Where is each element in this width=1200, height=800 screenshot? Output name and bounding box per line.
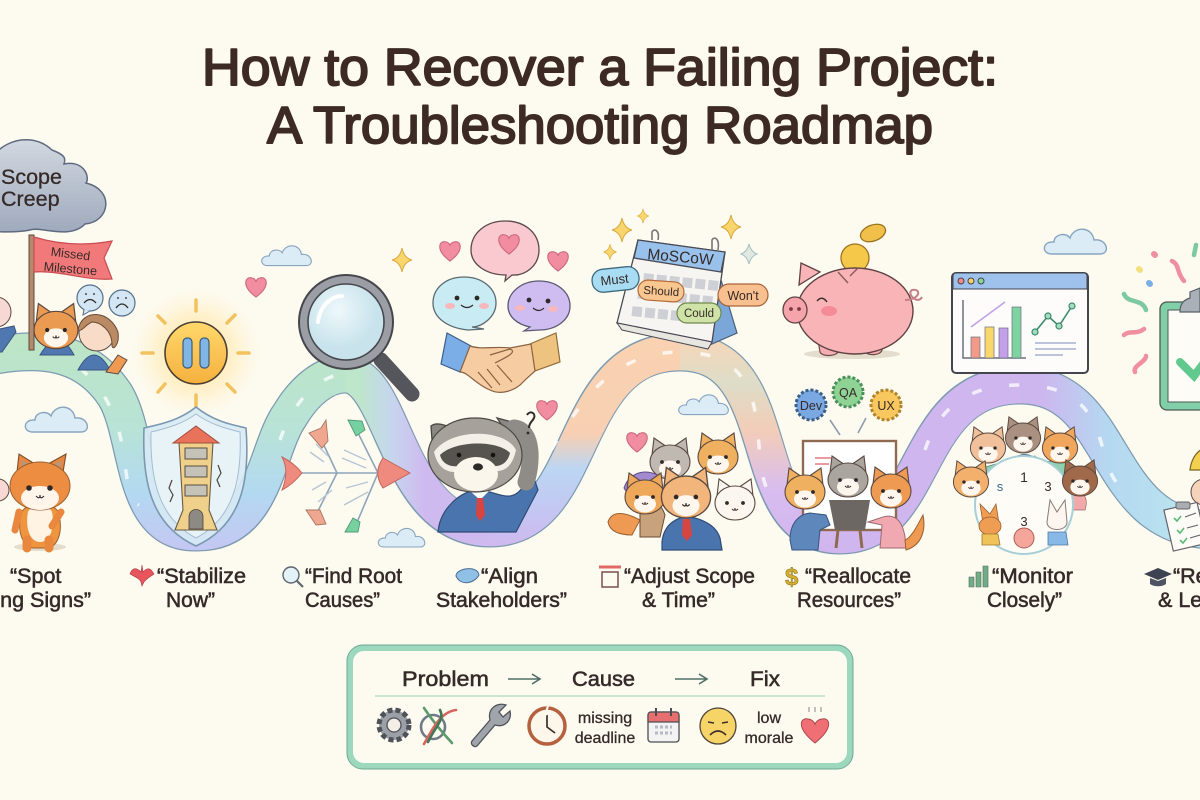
text: low morale: morale	[745, 730, 794, 747]
icon: heart	[801, 707, 829, 743]
label: reallocate resources: $	[785, 564, 799, 591]
label: align stakeholders	[436, 564, 567, 612]
sparkles	[604, 209, 757, 264]
small cloud	[262, 246, 311, 266]
arrow	[508, 674, 540, 684]
storm cloud: scope creep: Scope	[1, 165, 62, 189]
step 1: warning signs scene	[0, 140, 135, 551]
role gears: UX	[877, 399, 895, 413]
fox and colleague on hill	[0, 297, 127, 374]
clock table with team: 3	[1020, 514, 1028, 529]
label: adjust scope and time	[599, 564, 755, 612]
step 5: adjust scope and time scene	[591, 209, 768, 550]
label: find root causes: Causes”	[305, 588, 380, 612]
label: spot warning signs	[0, 564, 91, 612]
step 8: review and learn scene	[1124, 245, 1200, 551]
label: find root causes: “Find Root	[305, 564, 402, 588]
role gears: Dev	[800, 399, 823, 413]
small cloud	[1044, 229, 1106, 254]
icon: MoSCoW calendar	[617, 230, 737, 349]
label: monitor closely: “Monitor	[992, 564, 1073, 588]
flag: missed milestone: Missed	[50, 245, 91, 263]
priority labels	[591, 266, 768, 323]
label: review and learn	[1144, 564, 1200, 612]
label: stabilize now: Now”	[166, 588, 215, 612]
label: stabilize now: “Stabilize	[157, 564, 246, 588]
purple smiling speech bubble	[508, 281, 570, 331]
icon: gear	[379, 710, 409, 740]
priority labels: Could	[684, 308, 714, 320]
priority labels: Should	[643, 285, 679, 299]
title: A Troubleshooting Roadmap	[267, 97, 933, 155]
label: monitor closely: Closely”	[987, 588, 1062, 612]
storm cloud: scope creep	[0, 140, 106, 232]
label: spot warning signs: “Spot	[10, 564, 61, 588]
heart	[246, 278, 266, 297]
icon: dashboard window	[952, 273, 1088, 373]
small cloud	[679, 395, 728, 415]
flag: missed milestone	[29, 235, 112, 350]
inspector with checklist	[1164, 445, 1200, 551]
step 3: find root causes scene	[282, 248, 425, 547]
icon: pause sun	[130, 287, 262, 419]
icon: star	[392, 248, 412, 272]
text: low morale	[745, 710, 794, 747]
winding road	[0, 352, 1200, 535]
label: reallocate resources: Resources”	[797, 588, 901, 612]
flag: missed milestone: Milestone	[43, 260, 98, 278]
icon: broken clock	[529, 706, 565, 744]
icon: piggy bank	[783, 221, 922, 359]
clock table with team: 3	[1044, 479, 1052, 494]
text: low morale: low	[757, 710, 781, 727]
clock table with team: s	[997, 479, 1004, 494]
legend heading: problem: Problem	[402, 667, 489, 691]
whiteboard and team	[785, 441, 924, 550]
chart: fishbone diagram	[282, 420, 410, 532]
label: align stakeholders: Stakeholders”	[436, 588, 567, 612]
priority labels: Won't	[727, 289, 759, 303]
cat team	[608, 433, 755, 550]
hearts	[440, 242, 568, 271]
storm cloud: scope creep: Creep	[1, 187, 60, 211]
title: How to Recover a Failing Project:	[202, 39, 998, 97]
step 2: stabilize scene	[130, 246, 311, 546]
icon: handshake	[441, 333, 560, 392]
sad speech bubbles	[77, 285, 135, 316]
text: missing deadline	[575, 710, 635, 747]
legend heading: fix: Fix	[750, 667, 780, 691]
raccoon manager	[428, 401, 557, 532]
step 6: reallocate resources scene	[783, 221, 924, 550]
legend panel: problem cause fix	[347, 645, 853, 769]
label: adjust scope and time: & Time”	[642, 588, 715, 612]
heart	[627, 433, 647, 452]
role gears	[796, 377, 901, 435]
small cloud	[25, 407, 87, 432]
step labels	[0, 564, 1200, 612]
label: reallocate resources	[785, 564, 911, 612]
icon: completed clipboard	[1160, 288, 1200, 410]
standing fox	[0, 454, 70, 551]
clock table with team: 1	[1020, 469, 1028, 485]
clock table with team	[953, 417, 1098, 554]
step 7: monitor closely scene	[952, 229, 1106, 554]
step 4: align stakeholders scene	[428, 221, 570, 532]
icon: wrench	[471, 704, 510, 747]
pink speech bubble with heart	[471, 221, 539, 281]
label: align stakeholders: “Align	[481, 564, 538, 588]
text: missing deadline: missing	[578, 710, 632, 727]
legend heading: cause: Cause	[572, 667, 635, 691]
arrow	[675, 674, 707, 684]
label: find root causes	[283, 564, 402, 612]
role gears: QA	[839, 386, 858, 400]
title	[202, 39, 998, 155]
icon: MoSCoW calendar: MoSCoW	[647, 246, 715, 269]
label: stabilize now	[130, 564, 246, 612]
confetti	[1124, 245, 1196, 372]
icon: calendar	[648, 708, 679, 742]
blue smiling speech bubble	[433, 277, 496, 330]
icon: shield with shaky tower	[144, 407, 247, 546]
priority labels: Must	[600, 271, 630, 288]
text: missing deadline: deadline	[575, 730, 635, 747]
label: adjust scope and time: “Adjust Scope	[624, 564, 755, 588]
icon: magnifying glass	[299, 275, 412, 394]
icon: sad face	[700, 708, 736, 744]
icon: tangled wires	[421, 708, 456, 744]
small cloud	[378, 528, 425, 547]
label: reallocate resources: “Reallocate	[805, 564, 911, 588]
label: monitor closely	[969, 564, 1073, 612]
